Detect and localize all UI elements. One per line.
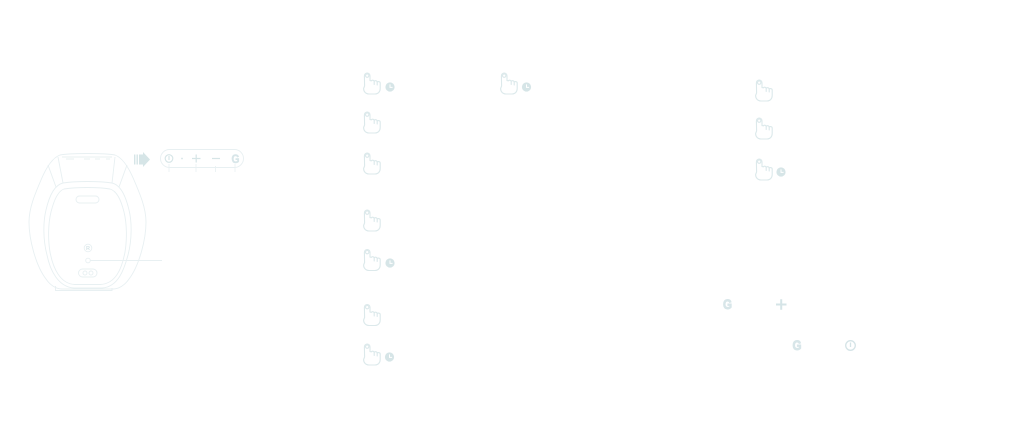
icon: plus [192, 154, 200, 162]
top button strip [62, 157, 112, 159]
port [86, 258, 90, 263]
icon: press 4 [364, 304, 380, 326]
icon: press 6 [756, 118, 772, 139]
icon: press 2 [364, 153, 380, 174]
icon: press and hold 3 [364, 250, 395, 270]
arrow [134, 152, 150, 167]
icon: minus [212, 158, 220, 160]
icon: press and hold 2 [501, 73, 531, 94]
icon: press and hold 1 [364, 73, 395, 94]
connector [78, 269, 97, 277]
icon: G: G [232, 152, 240, 166]
speaker inner back frame [44, 182, 131, 288]
port leader line [90, 260, 162, 262]
icon: plus button [776, 299, 786, 310]
stand [56, 286, 112, 290]
icon: G button: G [723, 296, 732, 312]
speaker back plate [49, 188, 126, 284]
icon: power [165, 155, 173, 162]
reset button [84, 244, 92, 252]
button panel [160, 150, 244, 172]
button leader lines [169, 164, 235, 172]
icon: power button [846, 341, 855, 350]
icon: press 5 [756, 80, 772, 101]
icon: G button second: G [792, 337, 802, 353]
handle slot [76, 196, 99, 203]
indicator dot [181, 158, 183, 159]
icon: press and hold 4 [364, 344, 394, 365]
speaker outer body [29, 154, 146, 289]
icon: press 1 [364, 112, 380, 133]
speaker rear illustration [29, 154, 162, 290]
reset label: R [86, 246, 90, 252]
speaker top panel [48, 157, 127, 187]
icon: press 3 [364, 210, 380, 231]
icon: press and hold 5 [756, 159, 786, 180]
